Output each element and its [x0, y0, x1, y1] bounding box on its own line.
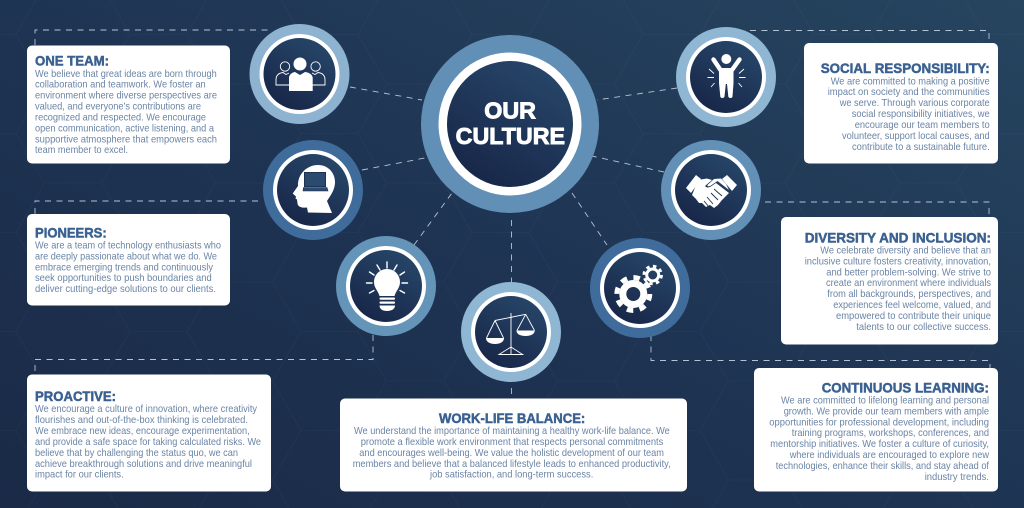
panel: proactive: [27, 374, 271, 492]
heading: SOCIAL RESPONSIBILITY:: [821, 60, 990, 76]
body text: We are committed to making a positive: [831, 76, 990, 87]
body text: valued, and everyone's contributions are: [35, 102, 201, 112]
body text: where individuals are encouraged to explore new: [789, 450, 989, 461]
icon: three people: [276, 58, 325, 91]
body text: We embrace new ideas, encourage experimentation,: [35, 426, 250, 437]
badge: continuous learning: [590, 238, 690, 338]
body text: [805, 246, 991, 333]
panel: continuous learning: [754, 368, 998, 492]
badge: pioneers: [263, 140, 363, 240]
body text: [35, 404, 261, 481]
body text: and better problem-solving. We strive to: [826, 267, 991, 278]
heading: CONTINUOUS LEARNING:: [822, 380, 989, 396]
body text: [353, 426, 671, 481]
body text: experiences feel welcome, valued, and: [833, 300, 991, 311]
title: [456, 97, 565, 149]
body text: promote a flexible work environment that respects personal commitments: [361, 437, 663, 448]
body text: collaboration and teamwork. We foster an: [35, 80, 206, 91]
heading: PIONEERS:: [35, 225, 107, 241]
body text: are deeply passionate about what we do. We: [35, 251, 217, 262]
body text: recognized and respected. We encourage: [35, 112, 206, 124]
badge: work-life balance: [461, 282, 561, 382]
badge: diversity and inclusion: [661, 140, 761, 240]
body text: contribute to a sustainable future.: [852, 142, 990, 153]
body text: [35, 240, 221, 295]
body text: empowered to contribute their unique: [836, 311, 991, 322]
body text: opportunities for professional development, including: [769, 417, 989, 428]
body text: members and believe that a balanced lifestyle leads to enhanced productivity,: [353, 459, 671, 470]
body text: We celebrate diversity and believe that an: [820, 246, 991, 256]
body text: open communication, active listening, and a: [35, 123, 214, 134]
panel: pioneers: [27, 214, 230, 306]
badge: social responsibility: [676, 27, 776, 127]
heading: WORK-LIFE BALANCE:: [439, 410, 585, 426]
central badge: our culture: [421, 35, 599, 213]
body text: talents to our collective success.: [856, 322, 991, 333]
body text: growth. We provide our team members with ample: [784, 406, 989, 417]
body text: create an environment where individuals: [826, 278, 991, 289]
heading: ONE TEAM:: [35, 52, 109, 68]
body text: embrace emerging trends and continuously: [35, 262, 214, 273]
body text: inclusive culture fosters creativity, innovation,: [805, 256, 991, 267]
body text: volunteer, support local causes, and: [842, 131, 990, 142]
panel: diversity and inclusion: [781, 217, 998, 344]
icon: handshake: [686, 175, 737, 208]
body text: deliver cutting-edge solutions to our clients.: [35, 284, 216, 295]
icon: light bulb: [366, 262, 408, 311]
body text: impact on society and the communities: [828, 87, 990, 98]
body text: We believe that great ideas are born through: [35, 69, 217, 80]
body text: [35, 69, 217, 156]
body text: encourage our team members to: [855, 120, 990, 131]
panel: work-life balance: [340, 398, 687, 492]
body text: We are a team of technology enthusiasts who: [35, 240, 221, 252]
body text: mentorship initiatives. We foster a culture of curiosity,: [770, 439, 989, 450]
body text: training programs, workshops, conferences, and: [792, 428, 989, 439]
body text: seek opportunities to push boundaries and: [35, 273, 212, 284]
body text: social responsibility initiatives, we: [852, 109, 990, 120]
icon: gears: [617, 266, 662, 310]
body text: We encourage a culture of innovation, where creativity: [35, 404, 258, 415]
body text: supportive atmosphere that empowers each: [35, 134, 217, 145]
badge: one team: [250, 24, 350, 124]
body text: team member to excel.: [35, 145, 128, 156]
body text: industry trends.: [925, 472, 989, 483]
body text: We understand the importance of maintaining a healthy work-life balance. We: [354, 426, 670, 437]
body text: [828, 76, 990, 153]
icon: person with raised arms: [708, 54, 746, 98]
heading: PROACTIVE:: [35, 388, 116, 404]
body text: achieve breakthrough solutions and drive meaningful: [35, 459, 252, 470]
body text: environment where diverse perspectives are: [35, 91, 217, 102]
body text: and encourages well-being. We value the holistic development of our team: [359, 448, 664, 459]
heading: DIVERSITY AND INCLUSION:: [805, 230, 991, 246]
body text: flourishes and out-of-the-box thinking is celebrated.: [35, 415, 248, 426]
panel: one team: [27, 46, 230, 164]
body text: technologies, enhance their skills, and stay ahead of: [776, 461, 989, 472]
body text: from all backgrounds, perspectives, and: [827, 289, 991, 300]
panel: social responsibility: [804, 43, 998, 164]
body text: believe that by challenging the status quo, we can: [35, 448, 238, 459]
body text: impact for our clients.: [35, 470, 124, 481]
badge: proactive: [336, 236, 436, 336]
body text: We are committed to lifelong learning and personal: [781, 396, 989, 406]
icon: head with laptop: [293, 165, 335, 213]
title: OUR: [484, 97, 536, 123]
body text: and provide a safe space for taking calculated risks. We: [35, 437, 261, 448]
body text: job satisfaction, and long-term success.: [429, 470, 593, 481]
body text: we serve. Through various corporate: [839, 98, 990, 109]
title: CULTURE: [456, 123, 565, 149]
body text: [769, 396, 989, 483]
icon: scales: [486, 313, 535, 354]
